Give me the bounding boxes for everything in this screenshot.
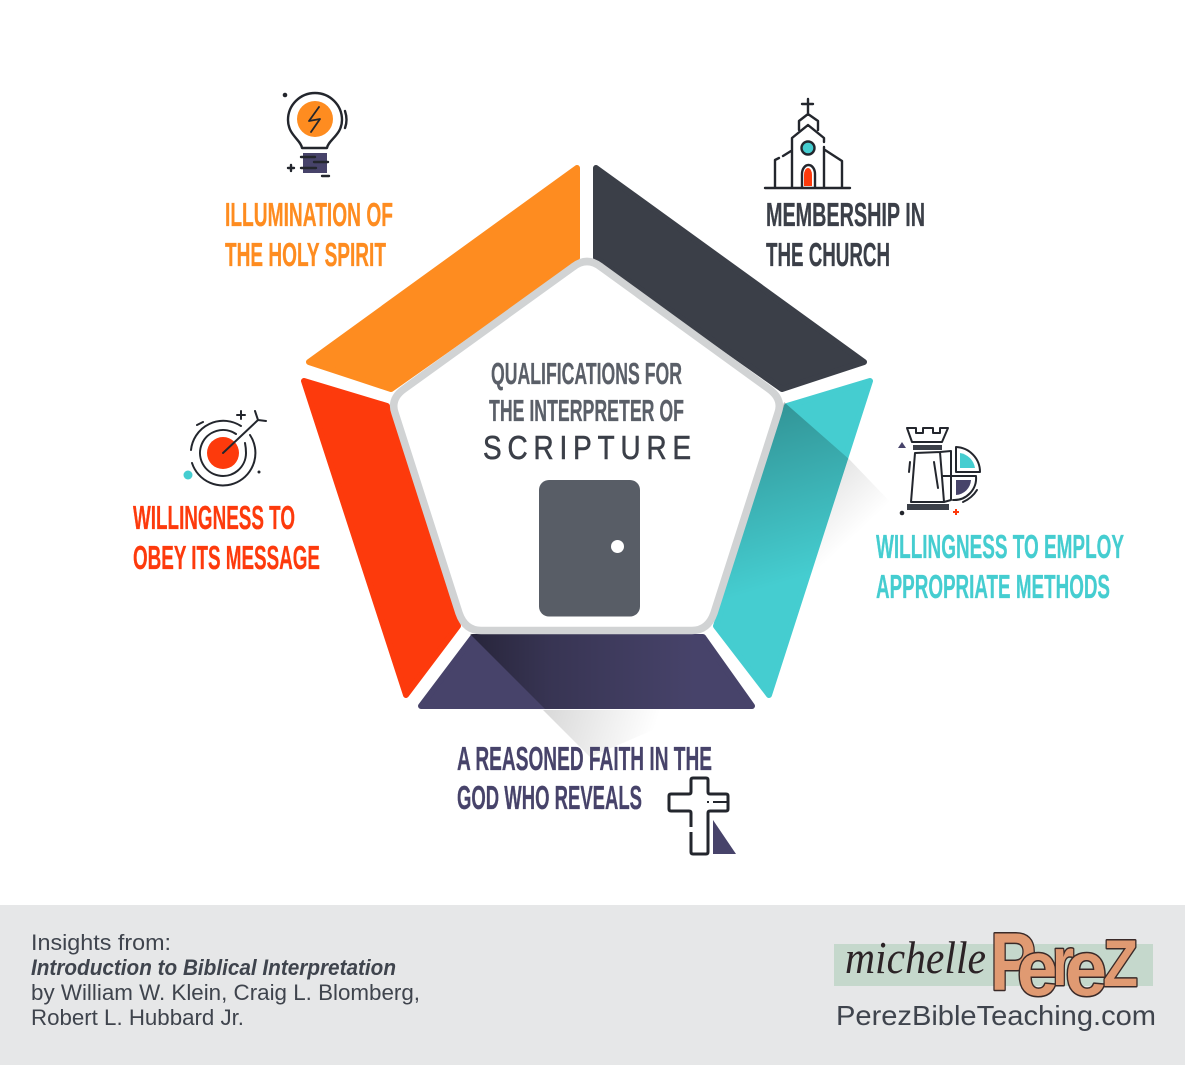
heading: reasoned faith: GOD WHO REVEALS [457, 779, 642, 816]
segment: purple [421, 634, 755, 757]
heading: obey: WILLINGNESS TO [133, 499, 295, 536]
icon: door [539, 480, 640, 616]
citation text: Insights from: [31, 930, 171, 955]
heading: reasoned faith [457, 740, 712, 816]
citation text: by William W. Klein, Craig L. Blomberg, [31, 980, 420, 1005]
logo: P [990, 917, 1036, 1008]
logo: r [1052, 924, 1074, 1000]
heading: illumination [225, 196, 393, 273]
heading: illumination: THE HOLY SPIRIT [225, 236, 386, 273]
citation text: Robert L. Hubbard Jr. [31, 1005, 244, 1030]
pentagon diagram [304, 168, 895, 757]
citation text: Introduction to Biblical Interpretation [31, 955, 396, 980]
logo [834, 917, 1153, 1012]
icon: chess rook and pie [898, 428, 980, 515]
heading: obey: OBEY ITS MESSAGE [133, 539, 320, 576]
logo: michelle [845, 932, 986, 983]
heading: methods [876, 528, 1124, 605]
center title [483, 356, 697, 466]
icon: target [184, 411, 266, 485]
icon: light bulb [283, 93, 346, 176]
heading: membership: MEMBERSHIP IN [766, 196, 925, 233]
heading: illumination: ILLUMINATION OF [225, 196, 393, 233]
icon: church [765, 99, 850, 188]
heading: obey [133, 499, 320, 576]
citation text [31, 930, 420, 1030]
heading: membership [766, 196, 925, 273]
heading: reasoned faith: A REASONED FAITH IN THE [457, 740, 712, 777]
segment: red [304, 381, 458, 695]
segment: orange [309, 168, 577, 389]
center title: QUALIFICATIONS FOR [491, 356, 682, 391]
center title: THE INTERPRETER OF [489, 393, 684, 428]
segment: teal [713, 378, 876, 698]
segment: charcoal [596, 168, 864, 389]
icon: cross [669, 778, 736, 854]
logo: Z [1103, 926, 1138, 1000]
website: PerezBibleTeaching.com [836, 1000, 1156, 1031]
central pentagon [394, 262, 779, 630]
logo: e [1065, 924, 1107, 1012]
heading: membership: THE CHURCH [766, 236, 890, 273]
center title: SCRIPTURE [483, 429, 697, 466]
logo: e [1017, 924, 1058, 1012]
footer band [0, 905, 1185, 1065]
